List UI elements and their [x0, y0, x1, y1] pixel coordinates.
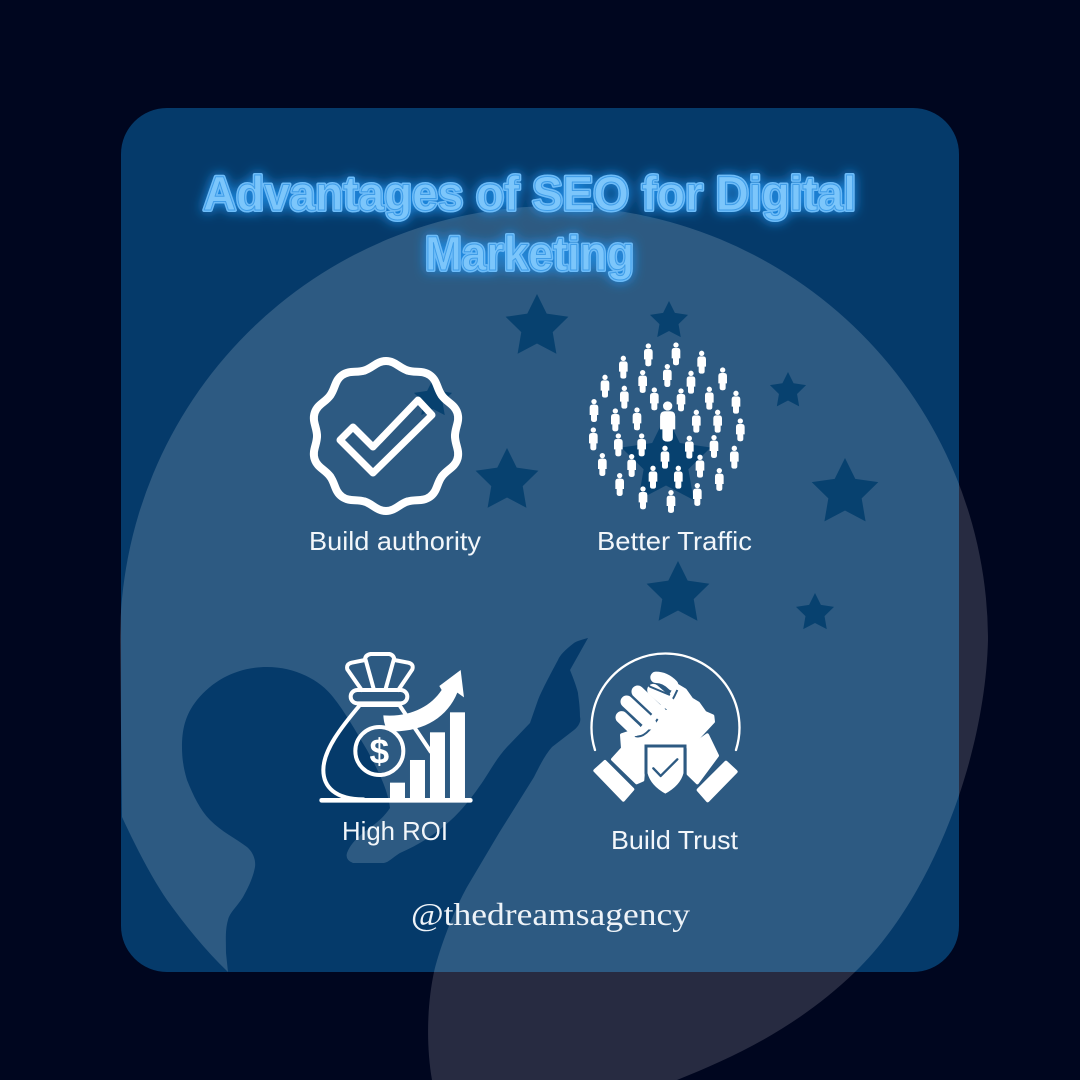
- title: Marketing: [425, 228, 634, 281]
- backdrop shape outside panel: [120, 206, 988, 1080]
- label: high roi: High ROI: [342, 816, 448, 846]
- icon: authority badge: [308, 361, 464, 511]
- icon: money bag and growth chart: $: [370, 733, 390, 772]
- icon: crowd of people: [589, 342, 745, 513]
- title: [203, 168, 856, 281]
- icon: money bag and growth chart: [319, 654, 473, 803]
- backdrop illustration: person reaching for stars: [121, 206, 959, 972]
- title: Advantages of SEO for Digital: [203, 168, 856, 221]
- label: build trust: Build Trust: [611, 825, 739, 855]
- icon: handshake with shield: [591, 654, 739, 801]
- panel: [121, 108, 959, 972]
- label: better traffic: Better Traffic: [597, 526, 752, 556]
- label: build authority: Build authority: [309, 526, 481, 556]
- handle: @thedreamsagency: [411, 896, 690, 932]
- title: Marketing: [425, 228, 634, 281]
- title: Advantages of SEO for Digital: [203, 168, 856, 221]
